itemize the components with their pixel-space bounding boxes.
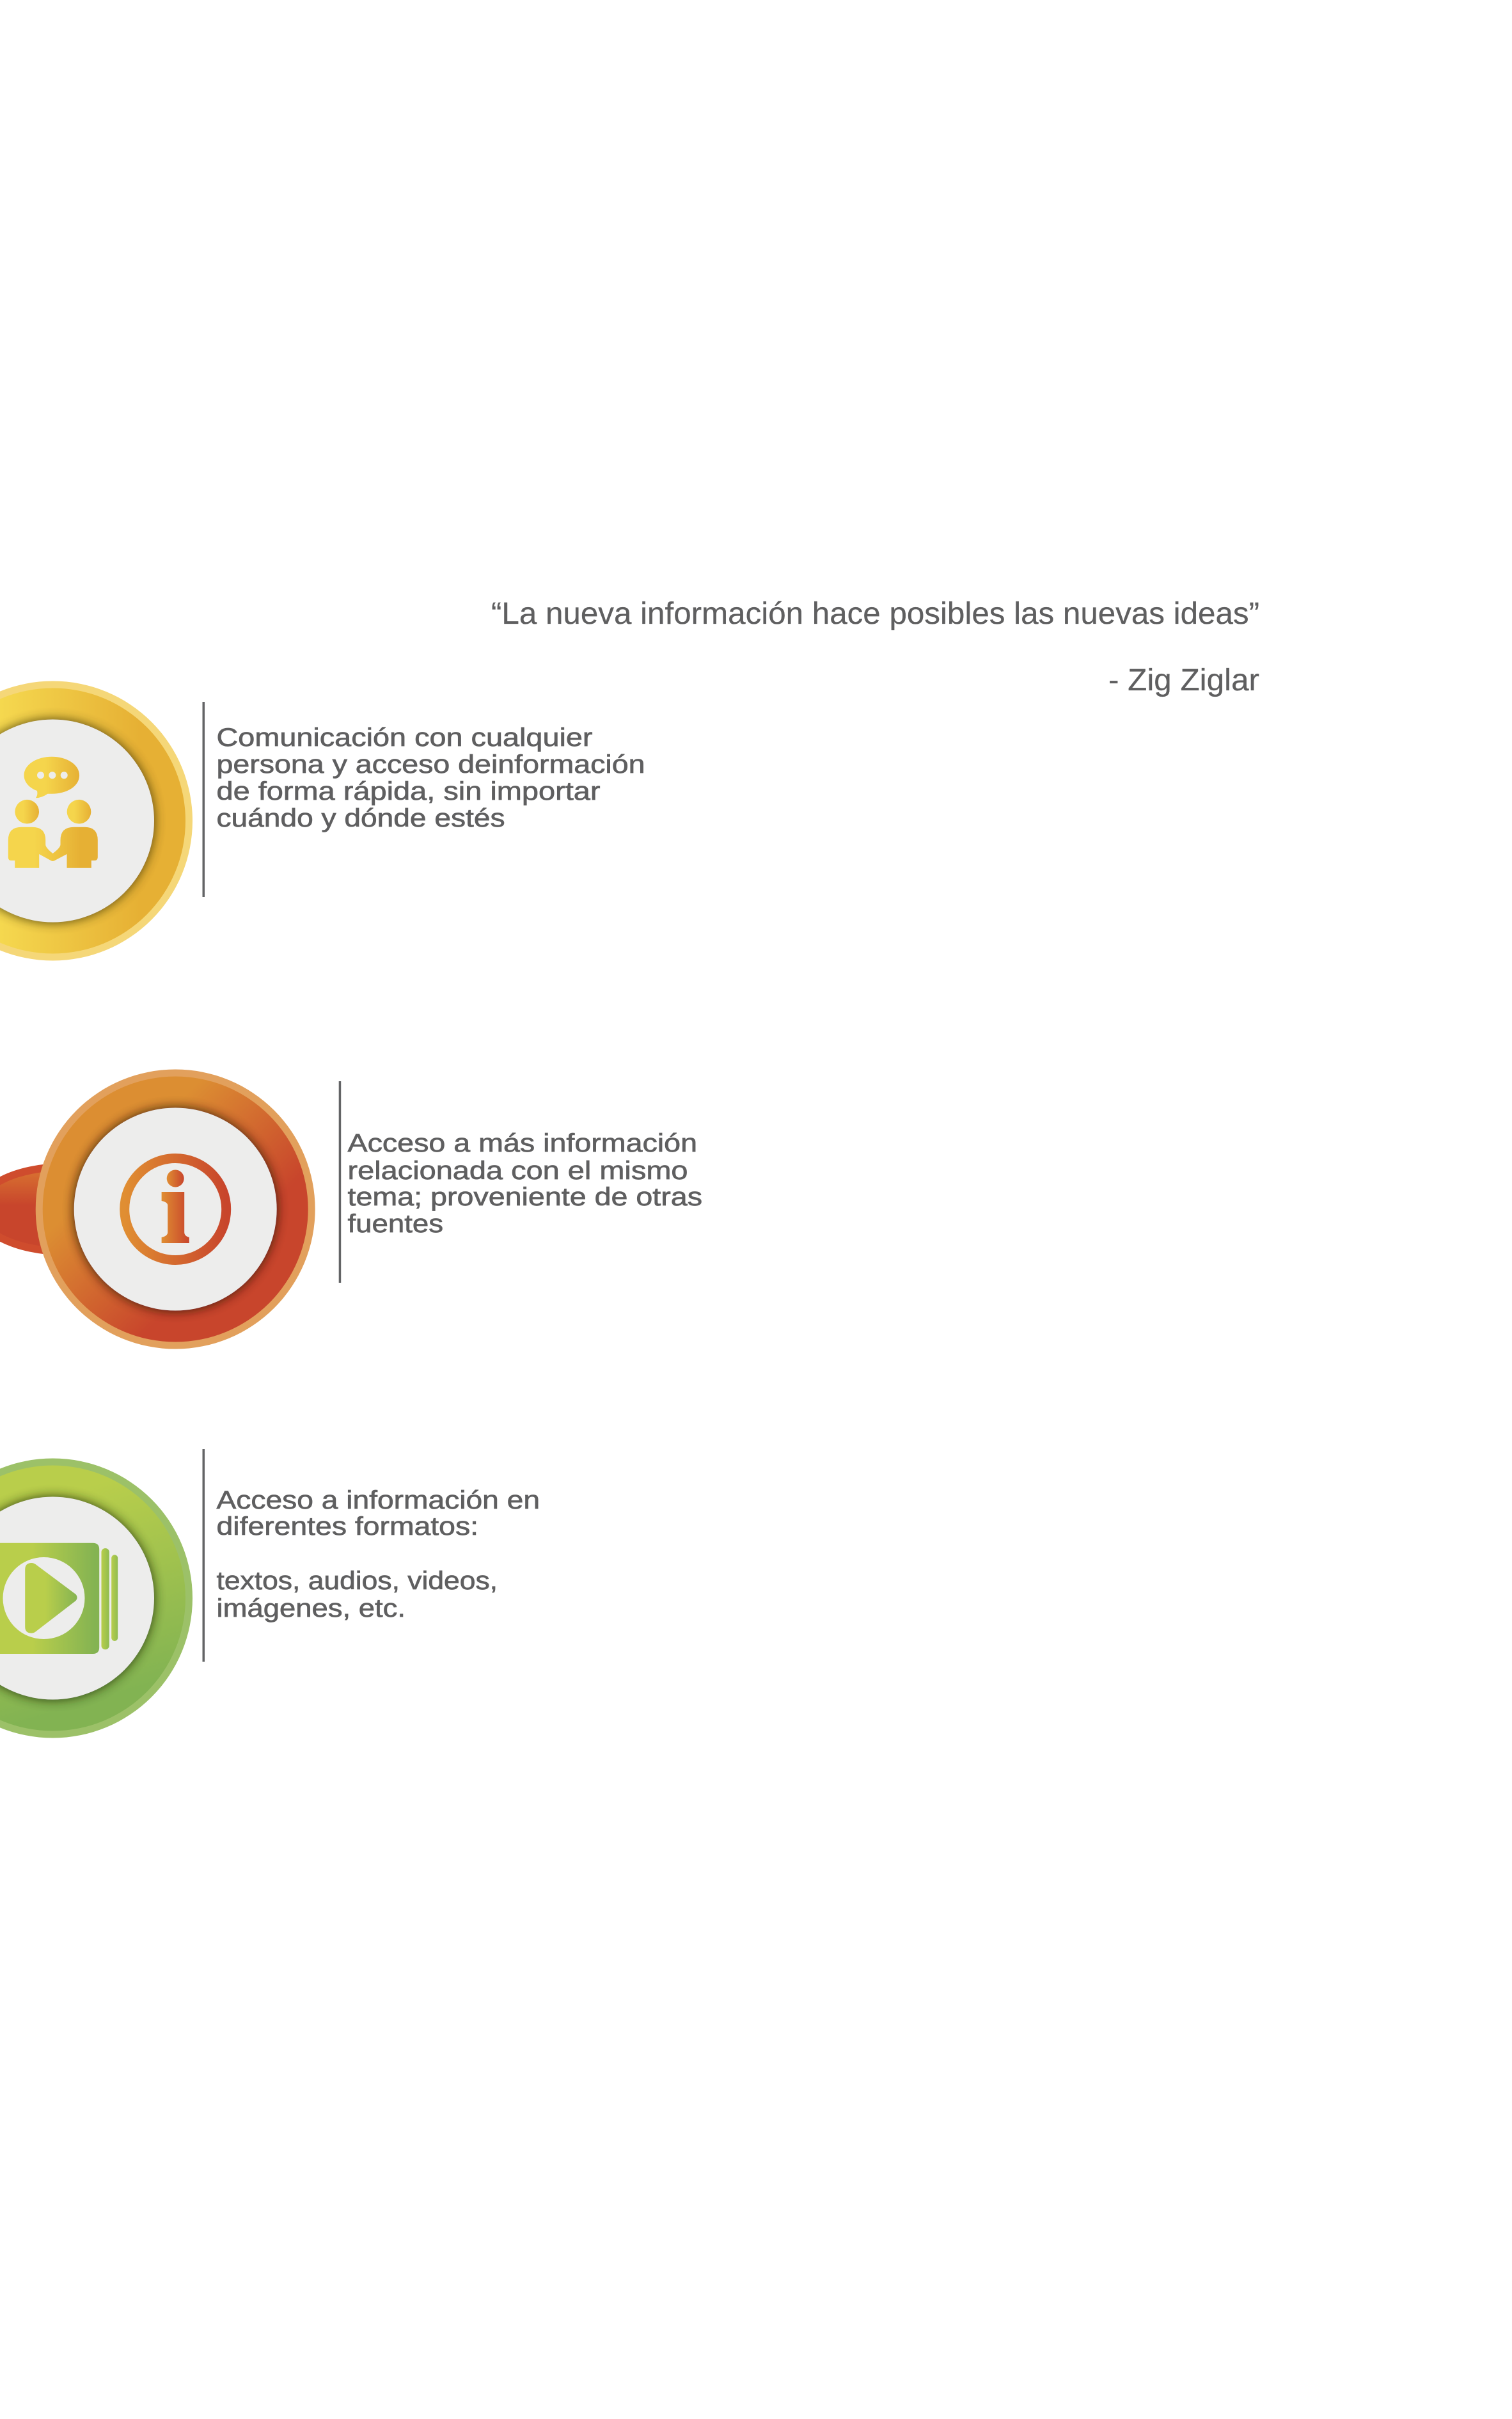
panel: formats: [0, 1449, 540, 1738]
text block: formats: [216, 1486, 540, 1622]
text block: formats: textos, audios, videos,: [216, 1567, 498, 1595]
orange circle badge: [36, 1070, 315, 1349]
text block: communication: de forma rápida, sin importar: [216, 777, 600, 805]
text block: formats: Acceso a información en: [216, 1486, 540, 1514]
quote: [491, 597, 1259, 697]
green circle badge: [0, 1459, 193, 1738]
divider line: [339, 1081, 341, 1283]
text block: related information: fuentes: [348, 1210, 443, 1238]
text block: related information: [348, 1129, 702, 1238]
quote author: - Zig Ziglar: [1108, 663, 1259, 697]
text block: related information: Acceso a más información: [348, 1129, 697, 1157]
text block: communication: [216, 724, 645, 832]
icon: information: [125, 1158, 226, 1260]
quote text: “La nueva información hace posibles las nuevas ideas”: [491, 597, 1259, 631]
yellow circle badge: [0, 681, 193, 961]
icon: two people talking: [8, 757, 98, 868]
text block: communication: cuándo y dónde estés: [216, 804, 505, 832]
icon: video player: [0, 1543, 118, 1654]
red blob behind badge: [0, 1163, 154, 1255]
text block: related information: relacionada con el mismo: [348, 1157, 688, 1185]
panel: related information: [0, 1070, 702, 1349]
divider line: [202, 1449, 205, 1662]
panel: communication: [0, 681, 645, 961]
text block: formats: imágenes, etc.: [216, 1594, 406, 1622]
text block: related information: tema; proveniente de otras: [348, 1183, 702, 1211]
text block: communication: persona y acceso deinformación: [216, 750, 645, 779]
text block: formats: diferentes formatos:: [216, 1512, 478, 1541]
divider line: [202, 702, 205, 897]
text block: communication: Comunicación con cualquier: [216, 724, 592, 752]
